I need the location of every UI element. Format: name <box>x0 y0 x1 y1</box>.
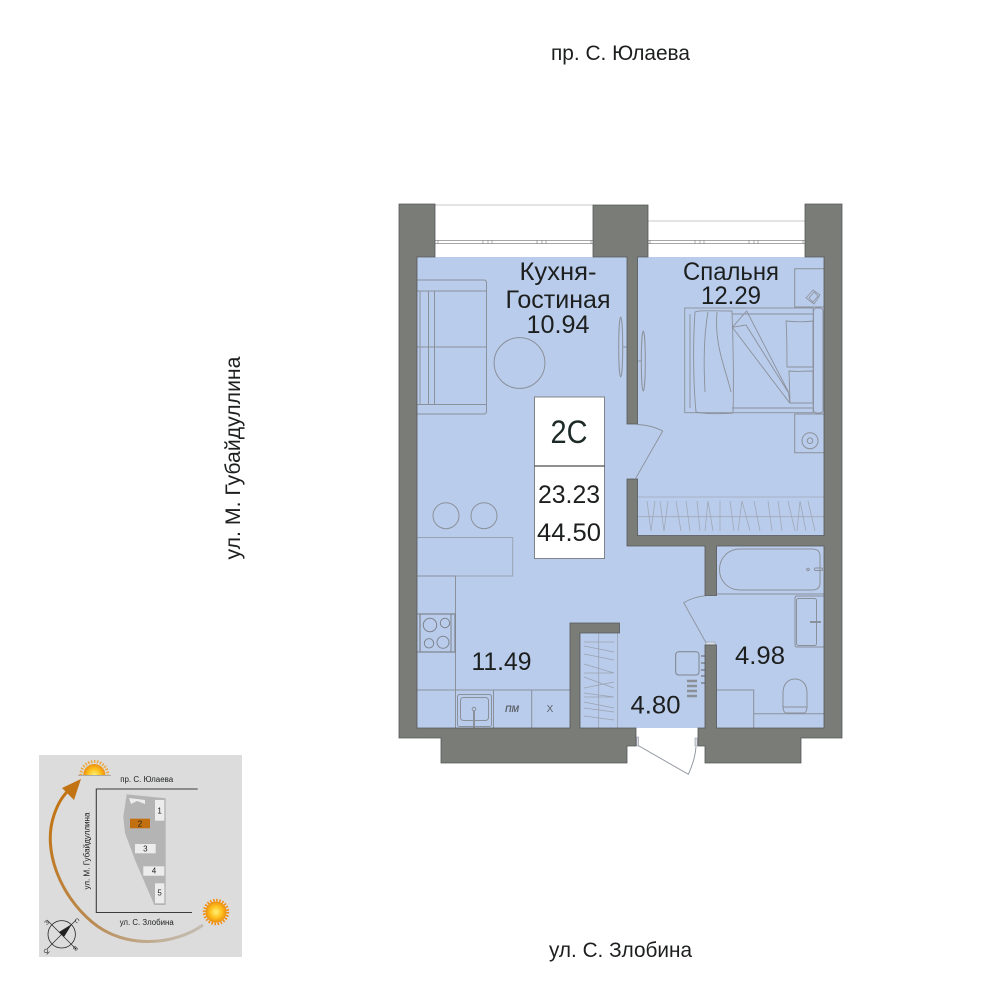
bed <box>685 308 823 414</box>
street label: north: пр. С. Юлаева <box>551 42 690 65</box>
total area: 44.50 <box>537 519 601 547</box>
tv bedroom <box>638 331 645 391</box>
site plot courtyard <box>129 798 145 804</box>
room area: kitchen: 11.49 <box>472 648 532 676</box>
toilet <box>783 679 807 713</box>
kitchen sink <box>458 694 492 728</box>
living area: 23.23 <box>538 481 600 509</box>
nightstand bottom with lamp <box>795 414 824 453</box>
site plot <box>123 794 166 905</box>
label: fridge: Х <box>547 704 554 715</box>
building 2 highlighted: 2 <box>138 820 143 828</box>
building 4 <box>143 866 164 876</box>
nightstand top <box>795 269 824 307</box>
bathroom fixtures <box>716 690 824 728</box>
tv living room <box>619 317 627 377</box>
minimap street west: ул. М. Губайдуллина <box>82 812 92 890</box>
right wall and lower partition <box>627 204 842 763</box>
sunset icon <box>204 900 228 924</box>
room label: living name: Гостиная <box>506 286 610 314</box>
building 1 <box>155 800 164 821</box>
kitchen counter <box>417 576 570 728</box>
room area: hallway: 4.80 <box>630 692 680 720</box>
room area: bathroom: 4.98 <box>735 642 785 670</box>
hallway closet <box>584 633 618 728</box>
coffee table <box>494 338 545 388</box>
minimap street south: ул. С. Злобина <box>120 918 174 927</box>
building 3: 3 <box>143 844 148 854</box>
site roads <box>96 789 198 912</box>
minimap street north: пр. С. Юлаева <box>120 775 174 784</box>
building 2 highlighted <box>130 819 150 828</box>
bedroom wardrobe <box>638 497 824 531</box>
site orientation minimap <box>39 755 242 957</box>
floor plan <box>399 204 842 774</box>
entrance door opening <box>636 728 698 747</box>
room area: bedroom: 12.29 <box>701 282 761 310</box>
hob <box>417 614 455 652</box>
info box <box>534 397 604 558</box>
street label: south: ул. С. Злобина <box>549 939 692 962</box>
door frames <box>636 642 715 746</box>
apartment type: 2С <box>550 414 588 450</box>
room label: bedroom: Спальня <box>683 258 779 286</box>
sofa <box>417 280 486 414</box>
stools <box>433 503 497 529</box>
walls <box>399 204 636 763</box>
compass: В <box>71 944 78 951</box>
compass: С <box>73 918 80 925</box>
building 1: 1 <box>157 806 162 816</box>
building 4: 4 <box>152 866 157 876</box>
sunrise icon <box>78 760 111 776</box>
bedroom door <box>636 424 663 478</box>
sun path arrow <box>50 779 203 942</box>
compass: З <box>44 920 51 927</box>
room area: living: 10.94 <box>526 311 590 339</box>
room label: kitchen-living: Кухня- <box>520 258 596 286</box>
compass <box>43 918 80 955</box>
bathroom sink <box>795 596 824 647</box>
windows <box>435 205 805 244</box>
building 5 <box>155 883 164 903</box>
dining table <box>417 538 513 576</box>
compass: Ю <box>43 946 52 955</box>
label: dishwasher: ПМ <box>505 704 519 714</box>
bathtub <box>716 549 824 594</box>
bathroom door <box>684 596 706 643</box>
building 3 <box>135 844 156 854</box>
water heater and meters <box>676 652 705 696</box>
building 5: 5 <box>157 888 162 898</box>
top middle pier and partition <box>593 205 648 424</box>
street label: west: ул. М. Губайдуллина <box>222 356 245 560</box>
room floor <box>417 257 824 728</box>
entrance door <box>637 745 696 774</box>
